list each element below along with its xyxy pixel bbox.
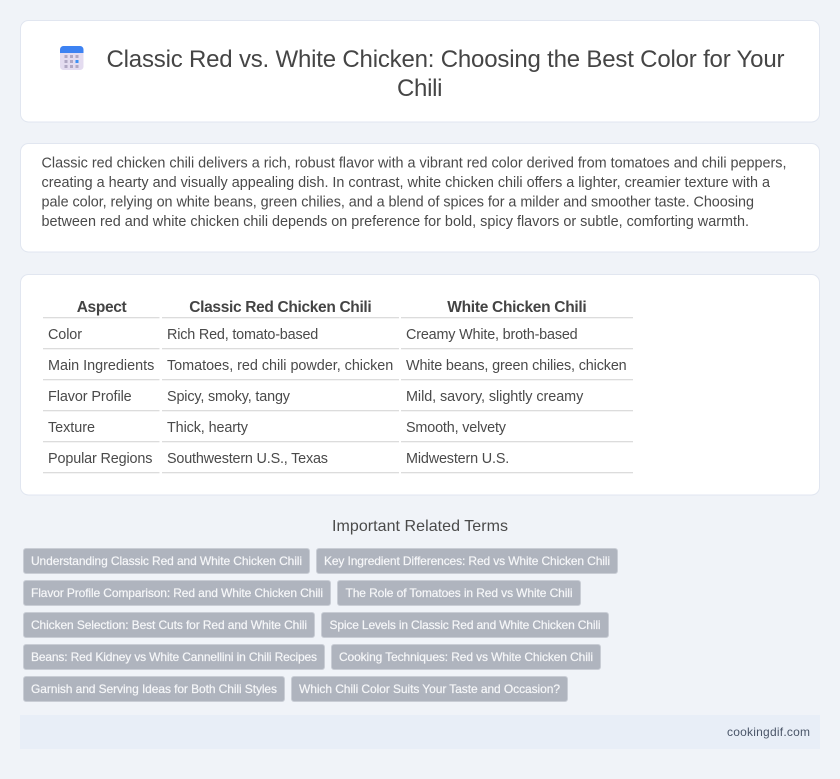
footer — [20, 715, 820, 749]
text block: introduction — [42, 156, 786, 230]
table row: texture: Smooth, velvety — [406, 420, 507, 436]
table row: main ingredients: White beans, green chilies, chicken — [406, 358, 627, 374]
title: Chili — [397, 75, 442, 102]
tag — [24, 676, 284, 702]
tag: Garnish and Serving Ideas for Both Chili Styles — [31, 682, 277, 696]
text block: introduction: between red and white chicken chili depends on preference for bold, spicy flavors or subtle, comforting warmth. — [42, 214, 749, 230]
icon: calendar — [60, 46, 84, 70]
table row: popular regions: Popular Regions — [48, 451, 152, 467]
tag: Chicken Selection: Best Cuts for Red and White Chili — [31, 618, 307, 632]
table row: color: Color — [48, 327, 82, 343]
tag: Spice Levels in Classic Red and White Chicken Chili — [330, 618, 600, 632]
table row: main ingredients: Tomatoes, red chili powder, chicken — [167, 358, 393, 374]
tag — [24, 612, 314, 638]
tag — [24, 580, 330, 606]
tag: Beans: Red Kidney vs White Cannellini in Chili Recipes — [31, 650, 317, 664]
table row: main ingredients: Main Ingredients — [48, 358, 154, 374]
tag: Cooking Techniques: Red vs White Chicken Chili — [339, 650, 593, 664]
tag — [24, 644, 324, 670]
panel: introduction — [20, 144, 820, 252]
table row: color: Rich Red, tomato-based — [167, 327, 318, 343]
table row: popular regions: Midwestern U.S. — [406, 451, 509, 467]
tag — [332, 644, 600, 670]
title — [106, 46, 784, 102]
tag — [338, 580, 580, 606]
table row: color — [48, 327, 578, 343]
footer: cookingdif.com — [727, 725, 810, 739]
text block: introduction: Classic red chicken chili delivers a rich, robust flavor with a vibrant red color derived from tomatoes and chili peppers, — [42, 156, 786, 172]
tag list: related terms — [24, 548, 618, 702]
table row: main ingredients — [48, 358, 627, 374]
tag: Key Ingredient Differences: Red vs White Chicken Chili — [324, 554, 610, 568]
tag — [292, 676, 568, 702]
panel: comparison table — [20, 274, 820, 495]
table row: texture — [48, 420, 507, 436]
tag: Understanding Classic Red and White Chicken Chili — [31, 554, 302, 568]
title: Classic Red vs. White Chicken: Choosing the Best Color for Your — [106, 46, 784, 73]
text block: introduction: pale color, relying on white beans, green chilies, and a blend of spices for a milder and smoother taste. Choosing — [42, 194, 754, 210]
table row: color: Creamy White, broth-based — [406, 327, 578, 343]
tag: Which Chili Color Suits Your Taste and Occasion? — [299, 682, 560, 696]
table header: White Chicken Chili — [447, 299, 587, 316]
table row: flavor profile — [48, 389, 584, 405]
table row: flavor profile: Mild, savory, slightly creamy — [406, 389, 584, 405]
panel: title card — [20, 20, 820, 122]
table row: popular regions: Southwestern U.S., Texas — [167, 451, 328, 467]
table header: Classic Red Chicken Chili — [189, 299, 372, 316]
table row: flavor profile: Spicy, smoky, tangy — [167, 389, 291, 405]
heading: related terms: Important Related Terms — [332, 518, 508, 535]
table header — [77, 299, 587, 316]
table row: texture: Thick, hearty — [167, 420, 249, 436]
table row: popular regions — [48, 451, 509, 467]
tag — [24, 548, 310, 574]
tag — [316, 548, 618, 574]
tag — [322, 612, 608, 638]
tag: Flavor Profile Comparison: Red and White Chicken Chili — [31, 586, 323, 600]
tag: The Role of Tomatoes in Red vs White Chili — [346, 586, 572, 600]
text block: introduction: creating a hearty and visually appealing dish. In contrast, white chicken chili offers a lighter, creamier texture with a — [42, 175, 770, 191]
table row: flavor profile: Flavor Profile — [48, 389, 132, 405]
table row: texture: Texture — [48, 420, 95, 436]
table header: Aspect — [77, 299, 127, 316]
